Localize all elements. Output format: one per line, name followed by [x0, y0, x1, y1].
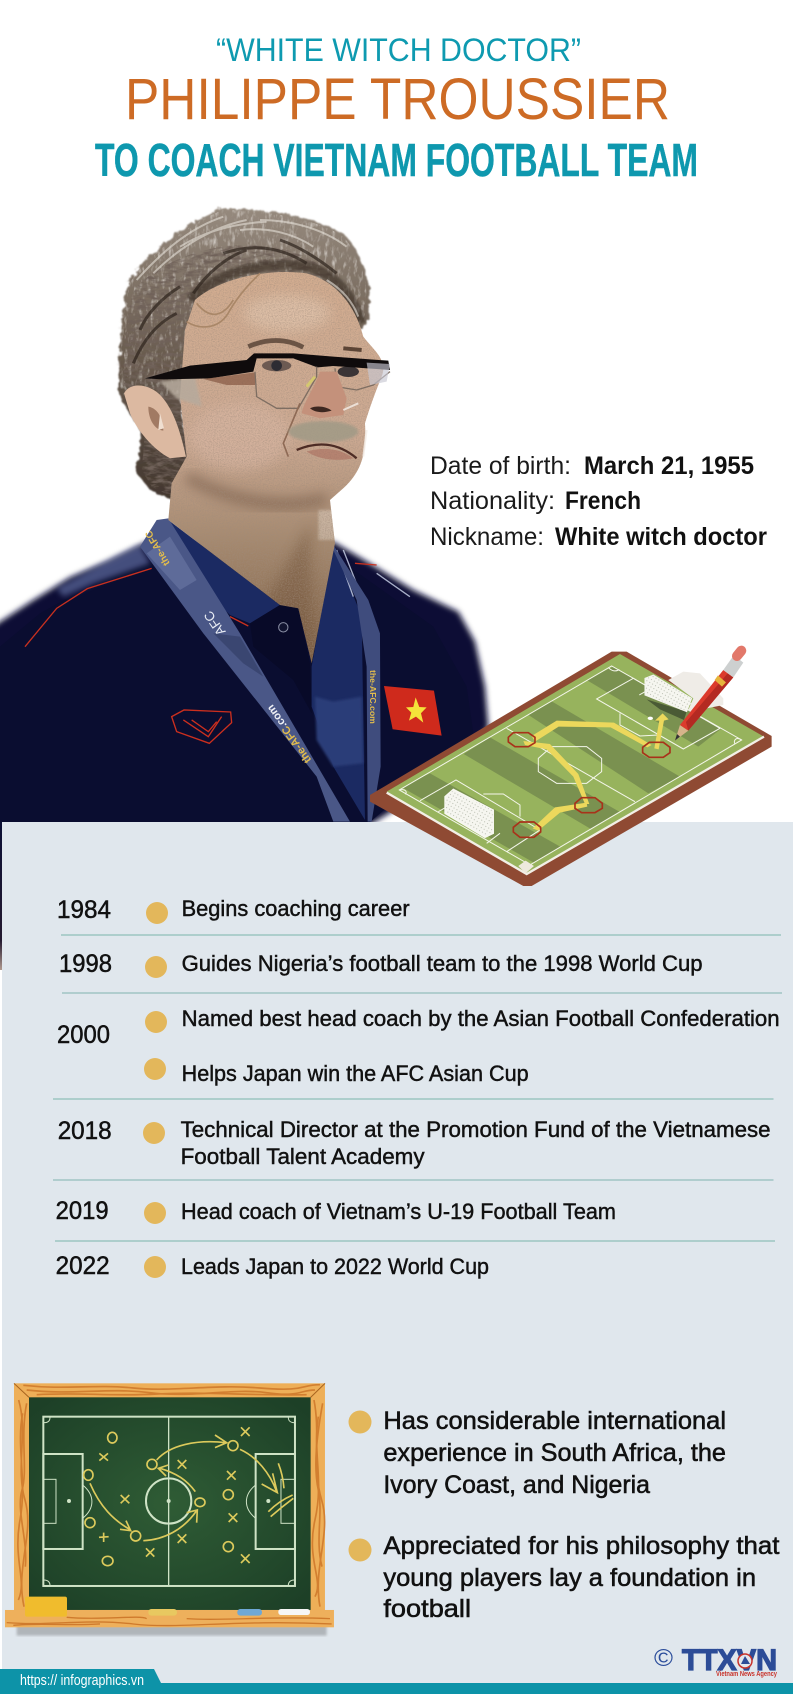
spots — [67, 1499, 270, 1503]
timeline row: 2019: 2019 — [56, 1197, 109, 1225]
fact: international experience — [348, 1407, 726, 1499]
fact: philosophy: football — [383, 1595, 471, 1623]
football — [648, 717, 653, 720]
pitch lines — [399, 666, 742, 865]
right goal — [645, 675, 692, 720]
timeline row: 1998: Guides Nigeria’s football team to the 1998 World Cup — [182, 951, 703, 976]
nose — [302, 372, 347, 418]
lanyard right — [333, 545, 381, 822]
skin grain — [168, 272, 383, 663]
panel: light background — [0, 822, 793, 1694]
nickname: White witch doctor — [555, 523, 767, 551]
timeline row: 2000: Helps Japan win the AFC Asian Cup — [182, 1061, 529, 1086]
mitred frame corners — [14, 1383, 325, 1397]
clipboard body — [370, 652, 772, 886]
timeline — [53, 896, 782, 1280]
eyebrow — [248, 340, 303, 347]
left goal — [445, 789, 493, 837]
shirt button — [279, 623, 288, 632]
timeline row: 1984: Begins coaching career — [182, 896, 410, 921]
yellow passing arrows — [523, 713, 669, 831]
pitch markings — [43, 1417, 295, 1586]
bottom corner flag — [518, 861, 534, 873]
torso in navy polo shirt: the-AFC.com — [368, 670, 378, 724]
timeline row: 2018: 2018 — [58, 1117, 112, 1145]
mouth — [297, 445, 357, 458]
hair strands light — [137, 217, 358, 327]
eyes — [262, 360, 291, 371]
wooden shelf — [5, 1610, 334, 1627]
fact: philosophy — [348, 1532, 779, 1623]
date of birth — [430, 452, 754, 480]
green pitch surface — [387, 654, 764, 874]
chalk players and arrows — [84, 1427, 293, 1566]
forehead hair wisps — [187, 273, 260, 327]
timeline row: 1984: 1984 — [57, 896, 111, 924]
timeline row: 1984 — [57, 896, 410, 924]
board — [29, 1397, 311, 1610]
torso in navy polo shirt: AFC — [201, 608, 228, 639]
fact: international experience: experience in South Africa, the — [383, 1439, 726, 1467]
torso in navy polo shirt — [0, 518, 488, 827]
timeline row: 1998: 1998 — [59, 950, 112, 978]
title line: white witch doctor: “WHITE WITCH DOCTOR” — [216, 32, 581, 68]
personal details — [430, 452, 767, 551]
sponge — [25, 1597, 67, 1617]
nationality: French — [565, 487, 641, 515]
nickname: Nickname: — [430, 523, 544, 551]
portrait photo of Philippe Troussier — [0, 208, 488, 827]
right edge white highlights — [343, 403, 367, 457]
icon: chalkboard with football tactics — [5, 1383, 334, 1636]
pencil — [675, 651, 743, 741]
nationality: Nationality: — [430, 487, 555, 515]
ear — [124, 386, 186, 458]
nationality — [430, 487, 641, 515]
fact: philosophy: Appreciated for his philosophy that — [383, 1532, 779, 1560]
hair strands dark — [133, 240, 337, 363]
shelf shadow — [17, 1625, 327, 1636]
shoulder edge on the left margin — [0, 822, 2, 970]
icon: tactics clipboard with pitch and pencil — [370, 651, 772, 886]
timeline row: 2000 — [57, 1006, 780, 1086]
skin shading — [187, 295, 335, 663]
footer bar with website: https:// infographics.vn — [20, 1672, 144, 1689]
logo: TTXVN: © — [654, 1645, 673, 1672]
temple grey hair — [160, 377, 202, 407]
nickname — [430, 523, 767, 551]
shirt logo — [172, 710, 232, 743]
paper behind pencil — [668, 672, 723, 717]
fact: international experience: Has considerable international — [383, 1407, 726, 1435]
timeline row: 2000: Named best head coach by the Asian Football Confederation — [182, 1006, 780, 1031]
Vietnam flag badge — [384, 686, 442, 736]
head and neck — [118, 208, 390, 663]
fact: international experience: Ivory Coast, and Nigeria — [383, 1471, 650, 1499]
red shoulder piping — [25, 568, 152, 647]
collar and placket — [157, 520, 280, 623]
wooden frame — [14, 1383, 325, 1613]
timeline row: 2022: 2022 — [56, 1252, 110, 1280]
pitch stripes — [401, 667, 722, 870]
timeline row: 2022: Leads Japan to 2022 World Cup — [181, 1254, 489, 1279]
date of birth: March 21, 1955 — [584, 452, 754, 480]
footer bar with website — [0, 1669, 793, 1694]
dark hairline shadow — [190, 265, 361, 323]
date of birth: Date of birth: — [430, 452, 571, 480]
moustache stubble — [288, 421, 358, 442]
logo: TTXVN: TTXVN — [682, 1644, 777, 1677]
key facts — [348, 1407, 779, 1623]
title line: Philippe Troussier: PHILIPPE TROUSSIER — [125, 67, 670, 132]
player rings — [508, 733, 670, 837]
white board edge — [387, 737, 764, 874]
glasses frame — [145, 353, 390, 379]
lanyard text: the-AFC — [144, 528, 173, 567]
title block — [95, 32, 698, 186]
timeline row: 2000: 2000 — [57, 1021, 110, 1049]
chalk sticks — [148, 1609, 310, 1616]
timeline row: 2018: Football Talent Academy — [181, 1144, 425, 1169]
lanyard left — [140, 518, 350, 822]
timeline row: 2022 — [56, 1252, 489, 1280]
timeline row: 2018 — [58, 1117, 771, 1169]
face and neck skin — [168, 272, 383, 663]
torso in navy polo shirt: the-AFC.com — [265, 702, 314, 765]
timeline row: 2018: Technical Director at the Promotion Fund of the Vietnamese — [181, 1117, 771, 1142]
hair mass — [118, 208, 369, 500]
fact: philosophy: young players lay a foundation in — [383, 1564, 756, 1592]
timeline row: 2019 — [56, 1197, 616, 1225]
nasolabial fold — [283, 403, 300, 457]
timeline row: 2019: Head coach of Vietnam’s U-19 Football Team — [181, 1199, 616, 1224]
